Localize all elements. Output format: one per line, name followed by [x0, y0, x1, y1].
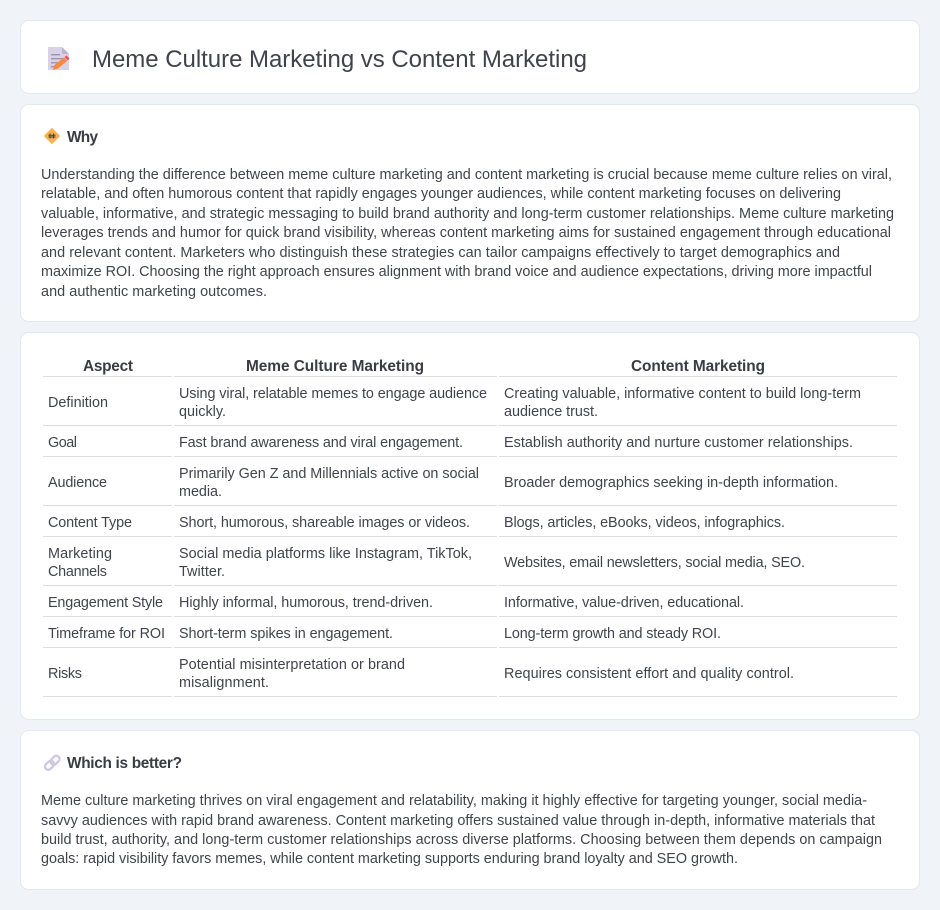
heading: why: Why: [67, 129, 98, 146]
row: risks: Potential misinterpretation or brand: [179, 657, 405, 673]
row: content type: Short, humorous, shareable images or videos.: [179, 515, 470, 531]
row: timeframe for roi: Timeframe for ROI: [48, 626, 165, 642]
row: risks: misalignment.: [179, 675, 269, 691]
row: audience: media.: [179, 484, 222, 500]
panel: why: [20, 104, 920, 322]
row: marketing channels: Twitter.: [179, 564, 225, 580]
row: definition: Definition: [48, 395, 108, 411]
row: timeframe for roi: Long-term growth and steady ROI.: [504, 626, 721, 642]
row: risks: Risks: [48, 666, 82, 682]
row: engagement style: Highly informal, humorous, trend-driven.: [179, 595, 433, 611]
panel: header: [20, 20, 920, 94]
row: audience: Primarily Gen Z and Millennials active on social: [179, 466, 479, 482]
row: content type: Blogs, articles, eBooks, videos, infographics.: [504, 515, 785, 531]
title: Meme Culture Marketing vs Content Marketing: [92, 46, 587, 73]
row: definition: [43, 386, 897, 426]
row: definition: Creating valuable, informative content to build long-term: [504, 386, 861, 402]
text block: why paragraph: Understanding the difference between meme culture marketing and content marketing is crucial because meme culture relies on viral,: [41, 167, 892, 183]
row: timeframe for roi: Short-term spikes in engagement.: [179, 626, 393, 642]
table header row: Content Marketing: [631, 358, 765, 375]
icon: memo with pencil: [48, 47, 70, 70]
row: content type: [43, 515, 897, 537]
row: audience: Audience: [48, 475, 107, 491]
row: audience: Broader demographics seeking in-depth information.: [504, 475, 838, 491]
row: definition: quickly.: [179, 404, 226, 420]
row: definition: audience trust.: [504, 404, 598, 420]
text block: why paragraph: valuable, informative, and strategic messaging to build brand authority and long-term customer relationships. Meme culture marketing: [41, 206, 894, 222]
row: definition: Using viral, relatable memes to engage audience: [179, 386, 487, 402]
row: timeframe for roi: [43, 626, 897, 648]
text block: which is better paragraph: [41, 793, 882, 867]
row: engagement style: [43, 595, 897, 617]
icon: chain link: [44, 754, 61, 771]
panel: comparison table: [20, 332, 920, 720]
row: marketing channels: [43, 546, 897, 586]
icon: orange diamond: [44, 128, 60, 144]
text block: why paragraph: leverages trends and humor for quick brand visibility, whereas content marketing aims for sustained engagement through educational: [41, 225, 891, 241]
text block: why paragraph: and relevant content. Marketers who distinguish these strategies can tailor campaigns effectively to target demographics and: [41, 245, 840, 261]
row: goal: Fast brand awareness and viral engagement.: [179, 435, 463, 451]
text block: why paragraph: maximize ROI. Choosing the right approach ensures alignment with brand voice and audience expectations, driving more impactful: [41, 264, 872, 280]
row: risks: Requires consistent effort and quality control.: [504, 666, 794, 682]
table header row: Aspect: [83, 358, 133, 375]
table header row: Meme Culture Marketing: [246, 358, 424, 375]
text block: which is better paragraph: goals: rapid visibility favors memes, while content marketing supports enduring brand loyalty and SEO growth.: [41, 851, 738, 867]
row: engagement style: Engagement Style: [48, 595, 163, 611]
row: marketing channels: Websites, email newsletters, social media, SEO.: [504, 555, 805, 571]
text block: which is better paragraph: build trust, authority, and long-term customer relationships across diverse platforms. Choosing between them depends on campaign: [41, 832, 882, 848]
row: audience: [43, 466, 897, 506]
text block: which is better paragraph: savvy audiences with rapid brand awareness. Content marketing offers sustained value through in-depth, informative materials that: [41, 813, 875, 829]
text block: why paragraph: relatable, and often humorous content that rapidly engages younger audiences, while content marketing focuses on delivering: [41, 186, 841, 202]
row: goal: [43, 435, 897, 457]
row: goal: Goal: [48, 435, 77, 451]
heading: which is better: Which is better?: [67, 755, 182, 772]
text block: why paragraph: and authentic marketing outcomes.: [41, 284, 267, 300]
panel: which is better: [20, 730, 920, 890]
text block: which is better paragraph: Meme culture marketing thrives on viral engagement and relatability, making it highly effective for targeting younger, social media-: [41, 793, 867, 809]
row: goal: Establish authority and nurture customer relationships.: [504, 435, 853, 451]
text block: why paragraph: [41, 167, 894, 300]
row: engagement style: Informative, value-driven, educational.: [504, 595, 744, 611]
table header row: [43, 358, 897, 377]
row: content type: Content Type: [48, 515, 132, 531]
row: marketing channels: Marketing: [48, 546, 112, 562]
row: risks: [43, 657, 897, 697]
row: marketing channels: Channels: [48, 564, 107, 580]
row: marketing channels: Social media platforms like Instagram, TikTok,: [179, 546, 472, 562]
